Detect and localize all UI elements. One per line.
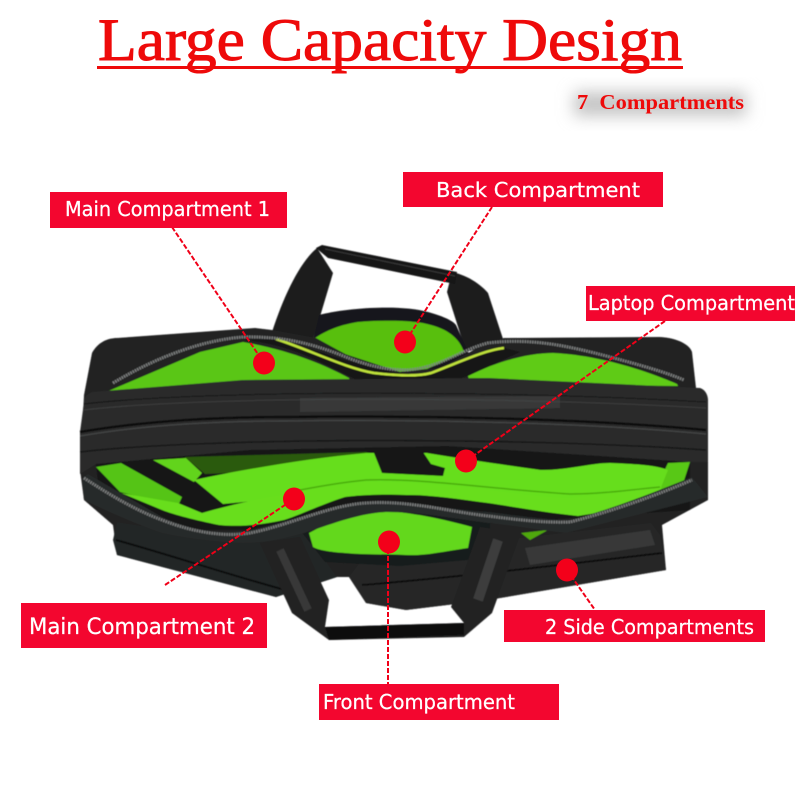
subtitle: 7 compartments: 7 Compartments <box>577 90 744 114</box>
label: Front Compartment <box>319 684 559 720</box>
label: Laptop Compartment: Laptop Compartment <box>588 291 795 315</box>
label: Front Compartment: Front Compartment <box>323 690 515 714</box>
back handle <box>272 245 504 352</box>
compartment strap <box>374 452 445 476</box>
top zipper <box>113 337 684 383</box>
laptop padding <box>194 453 668 504</box>
label: Back Compartment: Back Compartment <box>436 178 640 202</box>
middle band <box>80 378 708 474</box>
label: Main Compartment 1: Main Compartment 1 <box>65 197 270 221</box>
label: 2 Side Compartments <box>504 610 765 642</box>
top greens <box>106 339 678 392</box>
marker dots <box>253 330 578 582</box>
dashed leader lines <box>165 207 665 684</box>
back compartment <box>312 308 470 375</box>
label: 2 Side Compartments: 2 Side Compartments <box>545 615 754 639</box>
label: Back Compartment <box>403 172 663 207</box>
label: Main Compartment 1 <box>50 192 287 228</box>
title: Large Capacity Design <box>98 7 682 73</box>
lower compartment <box>96 446 690 530</box>
flap lining <box>121 482 662 526</box>
label: Laptop Compartment <box>586 286 795 321</box>
front compartment <box>300 505 548 566</box>
bag silhouette backing <box>80 328 708 610</box>
label: Main Compartment 2: Main Compartment 2 <box>29 615 255 640</box>
front handle <box>260 527 521 640</box>
lower pockets <box>113 522 666 610</box>
front flap <box>82 474 708 543</box>
label: Main Compartment 2 <box>21 603 267 648</box>
briefcase photo <box>80 245 708 640</box>
